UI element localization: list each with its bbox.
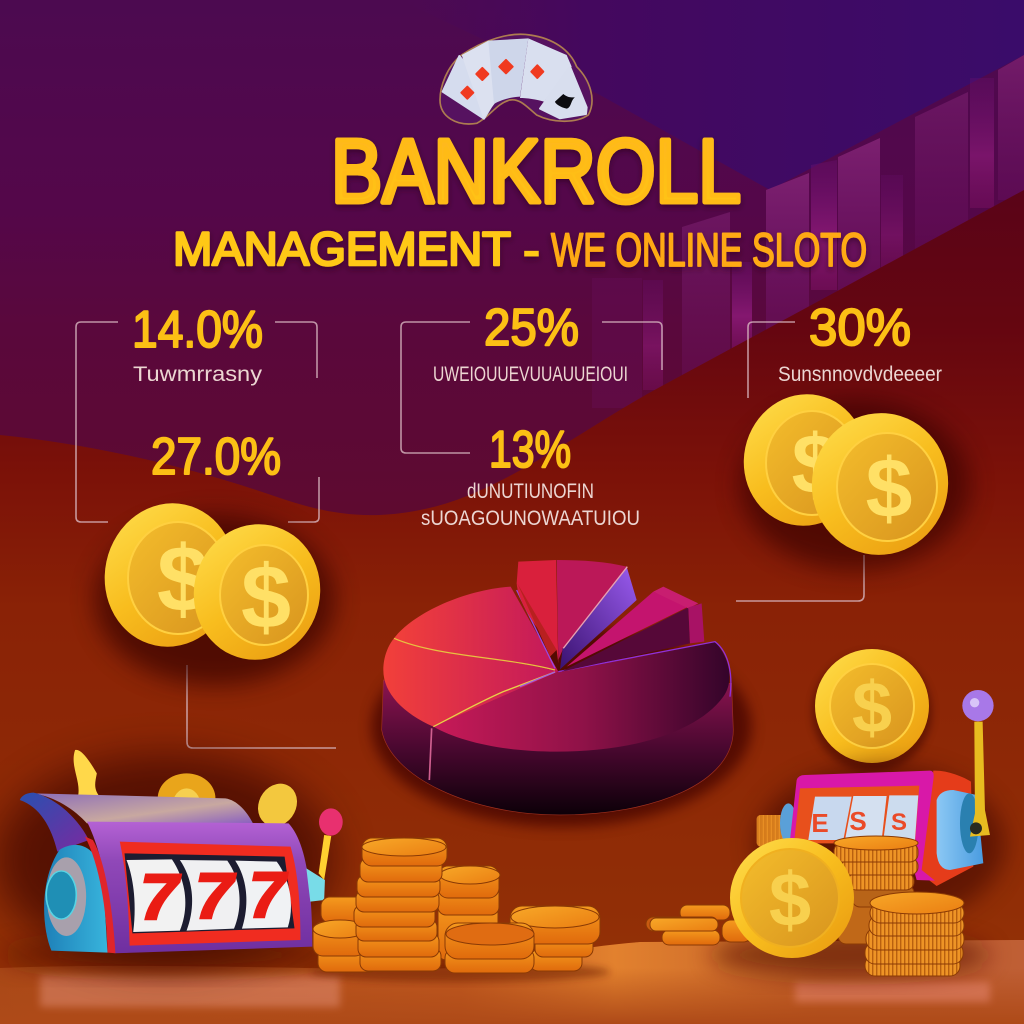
back stack [438, 866, 500, 960]
reel sevens: 7 [140, 861, 182, 933]
coin pair: left: $ [157, 526, 209, 631]
pie body [382, 680, 733, 815]
bracket: left stats [76, 322, 319, 522]
stat: 14.0% [132, 301, 263, 386]
subtitle: MANAGEMENT [173, 222, 511, 275]
subtitle: - [522, 223, 541, 276]
reels [126, 859, 185, 932]
slot machine: right [755, 690, 1005, 925]
side [20, 793, 89, 852]
front disc [445, 923, 534, 973]
slot machine: left [0, 750, 343, 965]
subtitle [173, 222, 867, 276]
title: BANKROLL [331, 122, 741, 222]
bracket: centre stats [401, 322, 662, 453]
stat: 14.0%: 14.0% [132, 301, 263, 359]
body [87, 822, 312, 953]
coin stacks: centre [313, 838, 600, 973]
frame [790, 771, 935, 881]
small scattered coins [646, 905, 752, 945]
right stack [510, 906, 600, 971]
stat: 27.0%: 27.0% [151, 428, 281, 486]
stat: 30%: Sunsnnovdvdeeeer [778, 363, 942, 386]
coin pair: left [91, 491, 335, 685]
pie chart [372, 560, 752, 827]
stat: 13%: 13% [489, 421, 571, 479]
stat: 30%: 30% [809, 299, 911, 357]
stat: 25% [433, 299, 628, 386]
icon: playing cards [440, 34, 592, 124]
window frame [120, 842, 300, 946]
main stack [354, 838, 447, 971]
raised slices [517, 560, 558, 663]
coin: floating [812, 649, 932, 772]
drum [937, 790, 983, 870]
connector: left coin [187, 665, 336, 748]
back stack [757, 815, 785, 847]
stat: 30% [778, 299, 942, 386]
stat: 13%: dUNUTIUNOFIN [467, 480, 594, 503]
front stack [865, 892, 964, 976]
subtitle: WE ONLINE SLOTO [551, 223, 867, 276]
coin: floating: $ [852, 668, 892, 748]
upper-left slice [394, 587, 558, 672]
lower-left slice [383, 638, 558, 727]
stat: 13% [421, 421, 640, 530]
roof [34, 793, 253, 823]
tall stack [834, 836, 918, 944]
floor [0, 933, 1024, 1024]
stat: 25%: 25% [484, 299, 579, 357]
stat: 13%: sUOAGOUNOWAATUIOU [421, 507, 640, 530]
coin: bottom large [730, 838, 854, 958]
slot machine: right: S [849, 806, 867, 836]
slot machine: left: 7 [249, 859, 288, 931]
flame [74, 750, 102, 799]
reels [808, 797, 852, 840]
coin pair: right [732, 383, 970, 570]
lever [306, 868, 325, 902]
slice dividers [394, 590, 731, 780]
slot machine: left: 7 [195, 860, 237, 932]
coins behind [158, 773, 215, 823]
coin pair: right: $ [866, 441, 912, 535]
reel symbols: E [811, 808, 829, 838]
stat: 25%: UWEIOUUEVUUAUUEIOUI [433, 363, 628, 386]
stat: 14.0%: Tuwmrrasny [133, 363, 263, 386]
lever [970, 722, 990, 837]
blue drum [44, 845, 108, 953]
coin stacks: right [646, 836, 964, 976]
coin pair: left: $ [241, 548, 291, 648]
side [920, 771, 973, 886]
slot machine: right: S [891, 809, 907, 836]
coin pair: right: $ [792, 417, 838, 511]
coin: bottom large: $ [769, 858, 811, 943]
connector: right coin [736, 555, 864, 601]
bracket: right stats [748, 322, 795, 398]
left stacks [313, 897, 378, 972]
large slice [433, 642, 729, 752]
